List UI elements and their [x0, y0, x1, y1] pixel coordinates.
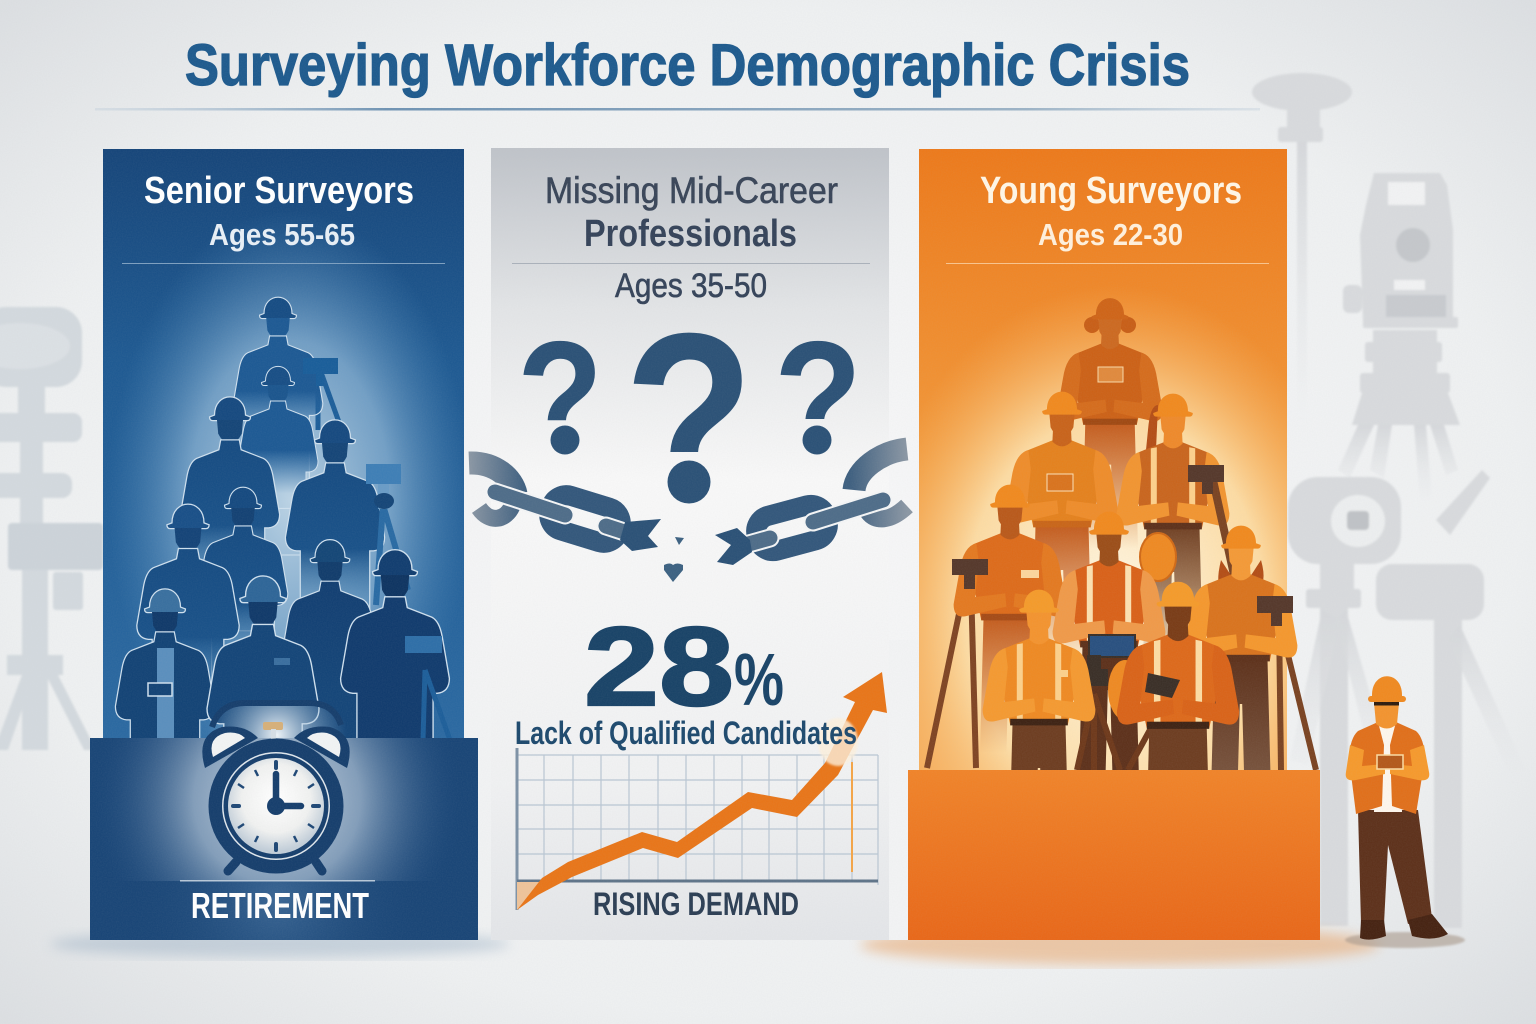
figures: senior front row: [115, 550, 450, 840]
icon: blue tablet: [1089, 635, 1135, 657]
panel: middle missing mid-career: [469, 148, 919, 940]
heading: young surveyors: Young Surveyors: [980, 170, 1242, 212]
heading: young surveyors: Ages 22-30: [1038, 217, 1183, 252]
figures: senior middle row: [137, 487, 378, 766]
heading: senior surveyors: Senior Surveyors: [144, 170, 414, 212]
panel: senior surveyors: [103, 149, 464, 840]
heading: missing mid-career professionals: Ages 35-50: [615, 267, 767, 305]
heading: young surveyors: [946, 170, 1269, 264]
label: lack of qualified candidates: Lack of Qualified Candidates: [515, 715, 857, 751]
heading: senior surveyors: [122, 170, 445, 264]
background silhouettes: right survey instruments: [1252, 73, 1528, 928]
icon: question marks: ?: [624, 282, 754, 555]
group: young surveyor figures: [927, 298, 1316, 872]
icon: question marks: ?: [774, 308, 862, 489]
statistic: 28 percent: 28: [584, 604, 734, 729]
heading: missing mid-career professionals: Missing Mid-Career: [545, 170, 838, 211]
heading: missing mid-career professionals: [512, 170, 870, 305]
label: rising demand: RISING DEMAND: [593, 886, 799, 922]
arrow: rising demand trend: [517, 672, 887, 910]
pedestal: young surveyors: [908, 770, 1320, 940]
heading: missing mid-career professionals: Professionals: [584, 213, 797, 255]
icon: second receiver and tripod: [1376, 564, 1528, 928]
icon: broken chain: [469, 449, 907, 582]
icon: question marks: ?: [517, 308, 603, 489]
figure: senior surveyor with instrument: [285, 420, 408, 654]
figure: young surveyor with tripod right: [1185, 526, 1316, 794]
panel: young surveyors: [919, 149, 1316, 872]
background silhouettes: left survey instruments: [0, 307, 103, 750]
figure: lone young surveyor: [1346, 676, 1448, 940]
group: senior surveyor silhouettes: [115, 297, 450, 840]
heading: senior surveyors: Ages 55-65: [209, 217, 355, 252]
icon: antenna pole: [1252, 73, 1352, 426]
icon: receiver head and tripod: [1288, 470, 1490, 926]
title: Surveying Workforce Demographic Crisis: [185, 33, 1190, 98]
figure: young surveyor with tripod left: [927, 485, 1066, 768]
figure: young surveyor front right: [1108, 582, 1239, 872]
icon: total station: [1338, 173, 1460, 500]
figure: young surveyor front left: [983, 590, 1095, 858]
figure: young surveyor centre: [1053, 512, 1165, 780]
icon: centre tripod: [1073, 655, 1158, 770]
icon: question marks: [524, 332, 854, 504]
label: retirement: RETIREMENT: [191, 885, 369, 926]
figure: young back row: [1006, 298, 1234, 662]
ground shadow: [50, 925, 1465, 965]
statistic: 28 percent: %: [734, 638, 784, 721]
pedestal: retirement: [90, 700, 478, 940]
figure: senior back row: [180, 297, 340, 631]
chart: rising demand: [517, 672, 887, 910]
statistic: 28 percent: [584, 604, 784, 729]
icon: alarm clock: [202, 703, 350, 874]
